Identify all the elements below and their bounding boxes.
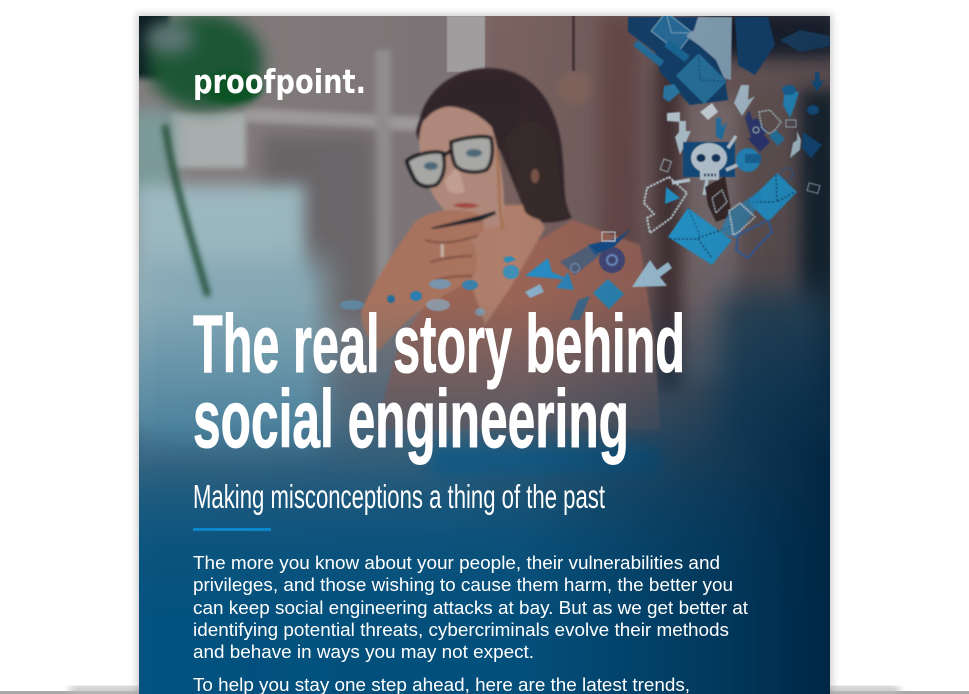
ear xyxy=(531,169,539,183)
icon: skull and crossbones xyxy=(672,136,742,195)
icon: large envelope upper xyxy=(720,173,797,238)
envelope top xyxy=(650,16,692,50)
icon: large envelope lower xyxy=(668,208,733,265)
nose xyxy=(445,165,465,194)
dark pixel mass xyxy=(628,17,830,105)
dark red tile under hand xyxy=(705,176,732,222)
small arrows xyxy=(734,85,755,116)
subtitle: Making misconceptions a thing of the past xyxy=(193,478,605,515)
right dark vignette xyxy=(538,16,830,694)
hair back xyxy=(420,68,572,222)
right pointer hand xyxy=(729,203,755,235)
intro paragraph: and behave in ways you may not expect. xyxy=(193,642,534,662)
threat icon swarm xyxy=(340,12,830,320)
white hand outline xyxy=(759,110,781,134)
intro paragraph: The more you know about your people, their vulnerabilities and xyxy=(193,553,720,573)
intro paragraph: can keep social engineering attacks at bay. But as we get better at xyxy=(193,598,748,618)
title xyxy=(193,299,685,465)
woman xyxy=(361,68,660,430)
shirt xyxy=(375,220,660,430)
glasses xyxy=(407,137,492,186)
lips xyxy=(452,203,480,208)
left pointer hand xyxy=(644,177,687,233)
panel: hero with photo and copy xyxy=(130,8,840,694)
logo: proofpoint. xyxy=(193,62,366,101)
hand xyxy=(361,210,484,350)
intro paragraph: privileges, and those wishing to cause them harm, the better you xyxy=(193,575,733,595)
hair side xyxy=(522,203,540,220)
accent rule xyxy=(193,528,271,531)
lower left swarm xyxy=(340,228,632,320)
face xyxy=(419,106,504,228)
page bottom shadow xyxy=(0,686,969,694)
title: social engineering xyxy=(193,374,629,465)
pen xyxy=(430,211,496,229)
blue blob xyxy=(736,148,760,172)
fringe xyxy=(414,104,493,141)
panel shadow xyxy=(137,14,832,694)
bottom blue overlay xyxy=(139,300,830,694)
intro paragraph: identifying potential threats, cybercriminals evolve their methods xyxy=(193,620,729,640)
ring xyxy=(441,244,444,257)
arrow large lower xyxy=(632,260,672,287)
neck and chest xyxy=(470,205,545,325)
blue tiles xyxy=(663,84,680,102)
finger lines xyxy=(425,236,478,280)
envelope mid xyxy=(676,53,727,104)
big pointer arrow xyxy=(686,17,732,80)
loose strand xyxy=(497,150,503,230)
photo background: blurred room xyxy=(139,16,830,542)
tiny outlines xyxy=(660,120,820,193)
intro paragraph xyxy=(193,553,748,662)
